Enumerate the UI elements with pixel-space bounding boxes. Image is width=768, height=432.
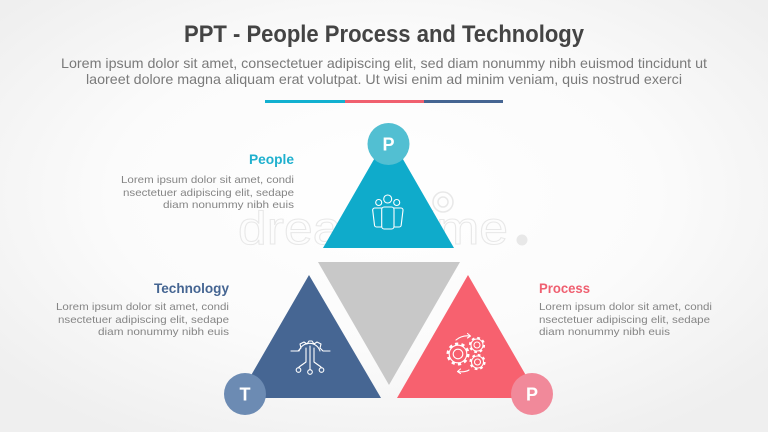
technology description: diam nonummy nibh euis xyxy=(98,326,229,338)
technology description: Lorem ipsum dolor sit amet, condi xyxy=(56,301,229,313)
process badge xyxy=(511,373,553,415)
people badge: P xyxy=(382,134,395,154)
process description xyxy=(539,301,712,338)
process description: nsectetuer adipiscing elit, sedape xyxy=(539,314,710,326)
panel: people xyxy=(121,123,454,248)
icon: gears xyxy=(448,334,484,374)
people description: nsectetuer adipiscing elit, sedape xyxy=(123,187,294,199)
technology badge xyxy=(224,373,266,415)
people description: diam nonummy nibh euis xyxy=(163,199,294,211)
subtitle text: laoreet dolore magna aliquam erat volutpat. Ut wisi enim ad minim veniam, quis nostrud exerci xyxy=(86,71,682,87)
icon: gear circuit xyxy=(291,341,330,374)
icon: people group xyxy=(373,195,403,229)
watermark xyxy=(238,192,528,254)
technology description: nsectetuer adipiscing elit, sedape xyxy=(58,314,229,326)
process triangle xyxy=(397,275,539,398)
title: PPT - People Process and Technology xyxy=(184,21,585,48)
panel: process xyxy=(397,275,712,415)
process badge: P xyxy=(526,384,538,404)
people description: Lorem ipsum dolor sit amet, condi xyxy=(121,174,294,186)
technology heading: Technology xyxy=(154,280,229,296)
people heading: People xyxy=(249,151,294,167)
subtitle text xyxy=(61,55,707,87)
process heading: Process xyxy=(539,280,590,296)
center gray triangle xyxy=(318,262,460,385)
technology description xyxy=(56,301,229,338)
technology triangle xyxy=(238,275,381,398)
people badge xyxy=(368,123,410,165)
tricolor divider xyxy=(265,100,503,103)
process description: diam nonummy nibh euis xyxy=(539,326,670,338)
people description xyxy=(121,174,294,211)
subtitle text: Lorem ipsum dolor sit amet, consectetuer adipiscing elit, sed diam nonummy nibh euismod tincidunt ut xyxy=(61,55,707,71)
watermark: dreamstime xyxy=(238,202,508,254)
process description: Lorem ipsum dolor sit amet, condi xyxy=(539,301,712,313)
panel: technology xyxy=(56,275,381,415)
technology badge: T xyxy=(240,384,250,404)
people triangle xyxy=(323,134,454,248)
